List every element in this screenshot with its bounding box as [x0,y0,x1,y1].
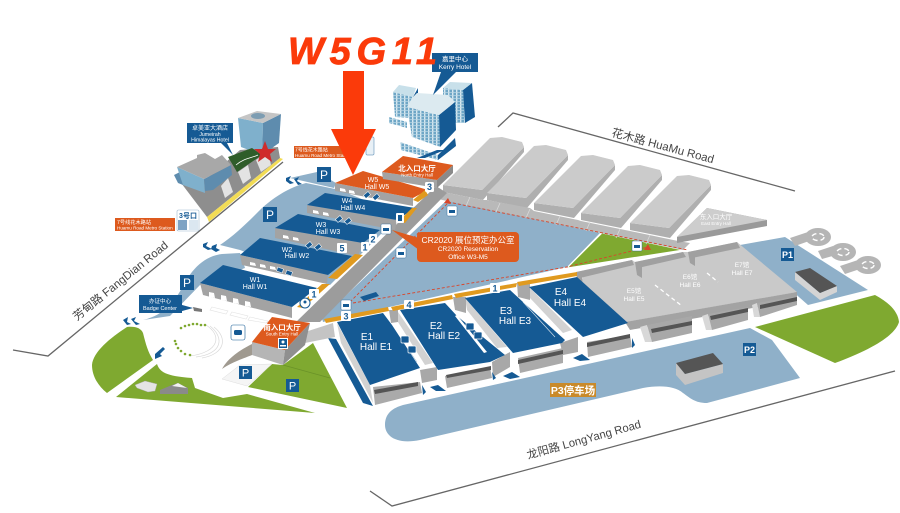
icon: exit 3 [177,210,199,231]
label: Huamu Road Metro Station north: Huamu Road Metro Station [295,153,351,158]
label: Kerry Hotel: 嘉里中心 [442,54,468,63]
sign 1 mid [361,242,369,252]
label: Kerry Hotel: Kerry Hotel [439,64,472,71]
label: P3 parking: P3停车场 [551,384,596,397]
P1 sign: P1 [782,250,793,260]
icon: escalator [447,206,457,216]
sign 2 [369,234,377,244]
north hall 3 [534,155,615,218]
icon: escalator [381,224,391,234]
hall W3: Hall W3 [316,229,340,236]
central triangle plaza [322,200,600,322]
facility icons [231,206,642,353]
icon: metro sign north [366,137,374,155]
P1 building [795,268,837,300]
road: LongYang Road: 龙阳路 LongYang Road [525,417,642,462]
numbered signs [309,182,500,322]
road: FangDian Road: 芳甸路 FangDian Road [70,238,171,323]
amber strips: west [297,190,428,308]
blue door marks [276,192,380,276]
hall E3: Hall E3 [499,316,532,327]
hall E4 [529,277,632,357]
callout: CR2020 reservation office [392,230,519,262]
north hall 2 [487,145,568,208]
P sign [286,379,299,392]
green triangle [567,233,683,268]
sign 1 east: 1 [492,284,498,294]
north hall 5 [630,175,711,238]
green lawns: south-west [92,327,347,413]
blue edge pieces [422,338,635,395]
hall E2 [400,303,505,388]
sign 2: 2 [370,234,376,244]
hall E2: E2 [430,321,443,332]
P sign: P [183,276,191,290]
parking lot: south entry [222,364,272,386]
sign 5 [337,243,347,254]
east halls E5 to E7: E7馆 [735,260,750,269]
E hall light walls [337,287,572,403]
label: Huamu Road Metro Station north [294,146,351,158]
icon: escalator [396,248,406,258]
sign 3 south [341,311,351,322]
plaza circle [174,323,222,358]
arrows: road entrances [123,176,302,359]
sign 3: 3 [427,182,432,192]
small buildings [135,381,188,394]
road: FangDian Road [13,162,283,356]
sign 4 [404,300,414,310]
hall W5: Hall W5 [365,184,389,191]
hall W3: W3 [316,222,326,229]
P sign: P [289,380,296,392]
Jumeirah hotel complex [174,111,283,222]
road: LongYang Road [370,371,895,506]
big red arrow [331,71,376,175]
hall W1: Hall W1 [243,284,267,291]
icon: car park [231,325,245,340]
road: HuaMu Road: 花木路 HuaMu Road [610,125,716,166]
hall W4 [307,193,415,230]
icon: truck doors [401,323,482,353]
label: Huamu Road Metro Station west [115,218,175,231]
hall E2: Hall E2 [428,331,461,342]
P2 sign: P2 [744,345,755,355]
parking area: P2 and P3 [385,328,800,441]
icon: escalator [341,300,351,310]
icon: exit 3: 3号口 [179,212,197,220]
P sign [263,207,277,222]
E hall left strip [328,338,373,406]
sign 3 south: 3 [343,312,349,322]
hall E1: Hall E1 [360,342,393,353]
icon: south entry sign [278,338,288,349]
label: Huamu Road Metro Station west: 7号线花木路站 [117,218,151,226]
east hall wings [640,296,797,342]
hall E1: E1 [361,332,374,343]
sign 1 west: 1 [311,290,317,300]
hall W2: Hall W2 [285,253,309,260]
east halls E5 to E7: Hall E6 [680,282,701,289]
roundabouts [790,228,881,274]
P2 sign [743,343,756,356]
green lawn: east [755,295,899,363]
hall E1 [337,313,422,405]
P2 building [676,353,723,385]
paved strip [438,192,690,250]
hall W1 [200,265,317,318]
sign 5: 5 [339,244,345,254]
P signs [180,167,794,392]
east entry hall: 东入口大厅 [700,212,733,221]
south entry hall: 南入口大厅 [263,322,301,332]
east halls E5 to E7: Hall E5 [624,296,645,303]
P sign: P [320,168,328,182]
amber strips: east [324,272,577,323]
north halls (grey) [443,137,711,238]
icon: red star [254,141,276,162]
sign 1 mid: 1 [362,242,368,252]
label: Badge Center: Badge Center [143,306,177,312]
label: Jumeirah Himalayas Hotel: Jumeirah [199,132,221,138]
hall W5: W5 [368,177,378,184]
south entry hall: South Entry Hall [266,332,298,336]
red dashed route [350,198,688,303]
E hall pillars and connectors [389,283,578,383]
label: Badge Center: 办证中心 [149,297,171,305]
Kerry Hotel building [389,82,475,160]
hall E4: E4 [555,287,568,298]
hall E4: Hall E4 [554,298,587,309]
east entry hall [677,208,767,243]
north hall 4 [581,165,662,228]
callout: CR2020 reservation office: CR2020 Reservation [438,246,499,253]
P1 sign [781,248,794,261]
hall W4: W4 [342,198,352,205]
east halls E5 to E7: E6馆 [683,272,698,281]
icon: accessible [300,298,310,308]
label: Jumeirah Himalayas Hotel: Himalayas Hotel [191,138,229,144]
hall E3: E3 [500,306,513,317]
badge building [193,307,202,312]
north entry hall: North Entry Hall [401,172,433,178]
sign 4: 4 [406,300,412,310]
callout: CR2020 reservation office: Office W3-M5 [448,254,488,261]
plaza sign [360,292,379,301]
P sign [317,167,331,182]
P sign [180,275,194,290]
hall W4: Hall W4 [341,205,365,212]
hall W5 [335,171,428,206]
P sign: P [242,368,249,380]
east halls E5 to E7 [576,242,797,342]
north entry hall: 北入口大厅 [398,163,436,173]
hall W3 [275,214,380,256]
P sign [239,366,252,380]
hall W1: W1 [250,277,260,284]
east halls E5 to E7: Hall E7 [732,270,753,277]
P sign: P [266,208,274,222]
faint plaza bays [210,307,268,323]
road: HuaMu Road [498,113,795,191]
east entry hall: East Entry Hall [701,221,731,226]
sign 1 west [309,289,319,300]
hall W2 [240,238,352,284]
sign 3 [425,182,434,192]
central grey walkway [296,186,447,322]
label: Kerry Hotel [432,53,478,95]
east halls E5 to E7: E5馆 [627,286,642,295]
hall E3 [465,290,565,373]
label: Badge Center [139,295,193,313]
north hall 1 [443,137,524,200]
south entry hall [222,317,335,369]
icon: escalator [632,241,642,251]
north entry hall [382,156,453,188]
icon: service W4 [396,213,404,223]
label: Huamu Road Metro Station west: Huamu Road Metro Station [117,226,173,230]
parking area: west lots [143,172,400,320]
callout: CR2020 reservation office: CR2020 展位预定办公室 [421,235,515,245]
label: Jumeirah Himalayas Hotel: 卓美亚大酒店 [192,124,228,132]
east halls E1 to E4 [324,272,635,406]
title: booth number: W5G11 [288,31,437,73]
hall W2: W2 [282,247,292,254]
label: Jumeirah Himalayas Hotel [187,123,233,155]
label: Huamu Road Metro Station north: 7号线花木路站 [295,146,328,154]
parking area: P1 [740,237,868,305]
sign 1 east [490,283,500,294]
